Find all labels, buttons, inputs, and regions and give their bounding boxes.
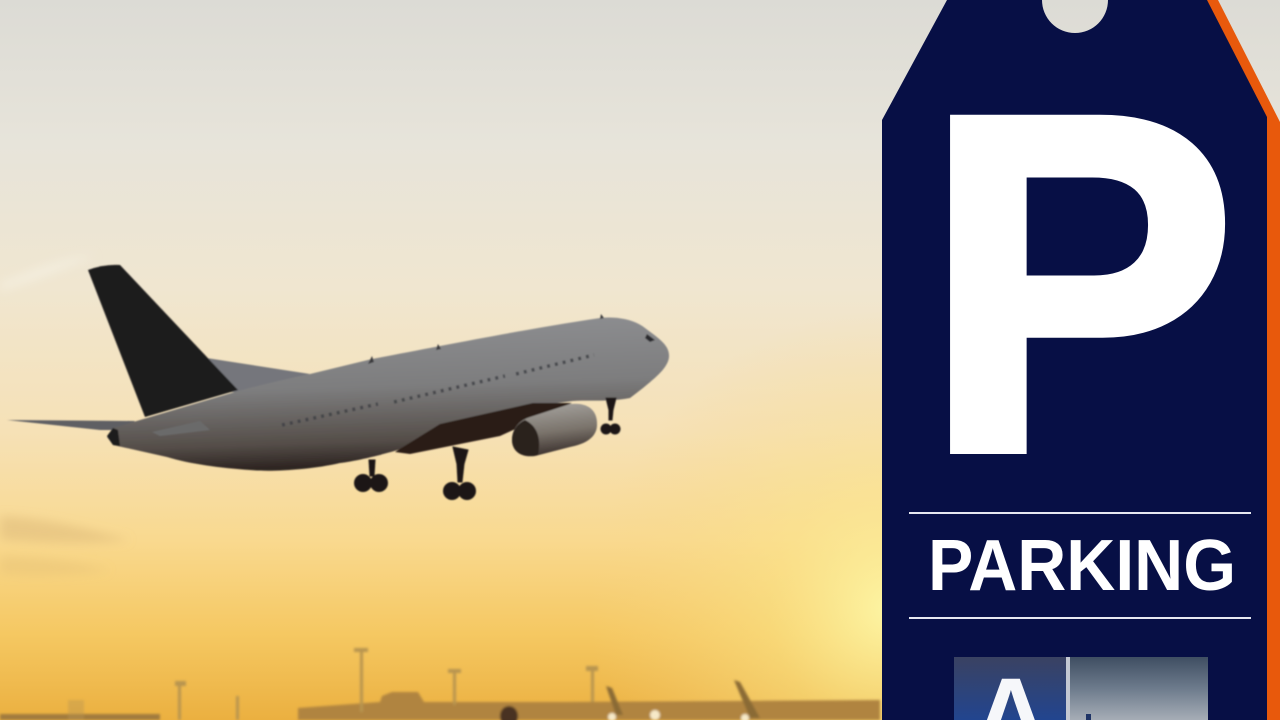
horizontal stabilizer [7,420,135,430]
wing fairing [152,421,210,436]
cockpit window [645,334,655,342]
far wing [200,357,310,392]
upper divider [909,512,1251,514]
dark figure [500,706,518,720]
PARKING label: PARKING [928,526,1236,606]
orange tag edge [1205,0,1280,720]
navy tag body [882,0,1267,720]
ground strip left [0,714,160,720]
cabin windows [282,355,594,425]
main gear rear [354,460,388,492]
wing underside [395,403,572,454]
fuselage [107,317,669,471]
tail fin [88,265,238,417]
engine [512,404,597,456]
main gear front [444,447,476,500]
logo tile [954,657,1208,720]
antennas [368,314,604,364]
lower divider [909,617,1251,619]
large P letter: P [923,15,1237,552]
airport skyline on the horizon [0,648,880,720]
terminal building [298,692,880,720]
airplane taking off [7,265,669,500]
light masts [68,648,598,720]
distant tail fins [606,680,760,718]
bright highlights [608,710,749,720]
parking tag [882,0,1280,720]
wispy clouds [0,256,130,575]
tail cone [107,428,120,446]
nose gear [601,398,620,434]
